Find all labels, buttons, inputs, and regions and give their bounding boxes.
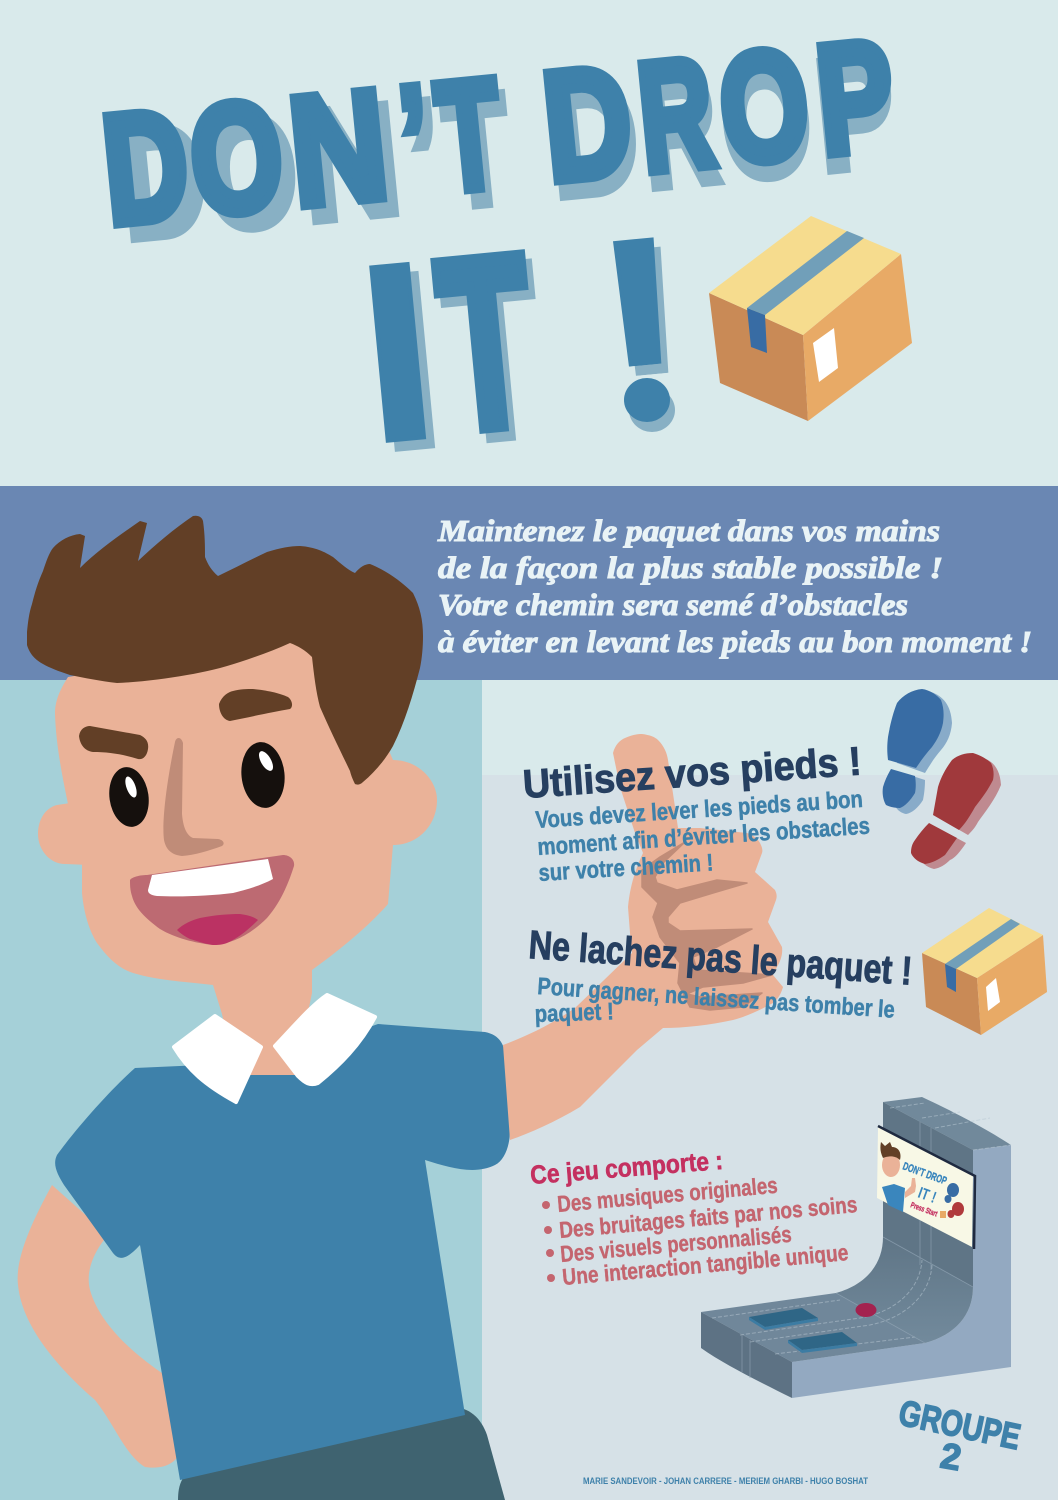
character mouth	[130, 855, 294, 945]
title line two shadow: T	[436, 215, 550, 491]
character ears	[38, 760, 437, 865]
cabinet back wall	[883, 1102, 973, 1287]
screen prompt: Press Start	[909, 1200, 939, 1219]
title line one shadow: D	[113, 91, 213, 272]
character pants	[178, 1407, 505, 1500]
title line one: ’	[392, 53, 438, 229]
button two	[788, 1332, 857, 1353]
title line one shadow: T	[437, 61, 517, 241]
cabinet top	[883, 1097, 1011, 1150]
title: DON'T DROP IT !	[95, 8, 902, 506]
panel: header background	[0, 0, 1058, 486]
title line one: O	[182, 68, 291, 250]
character hair	[27, 516, 423, 785]
body line two: paquet !	[534, 998, 614, 1028]
icon: large parcel	[709, 216, 912, 421]
heading: Ce jeu comporte: Ce jeu comporte :	[529, 1145, 724, 1190]
illustration: character	[18, 516, 783, 1500]
icon: small parcel	[922, 908, 1047, 1035]
character collar	[174, 995, 375, 1102]
title line two: T	[429, 205, 543, 482]
credits: MARIE SANDEVOIR - JOHAN CARRERE - MERIEM GHARBI - HUGO BOSHAT	[583, 1476, 868, 1486]
feature four: Une interaction tangible unique	[561, 1239, 849, 1290]
feature two: Des bruitages faits par nos soins	[558, 1191, 858, 1243]
thumb finger creases	[642, 842, 772, 1010]
button one	[749, 1308, 818, 1330]
screen icons	[940, 1183, 964, 1218]
red ball	[856, 1303, 876, 1317]
character eyes	[106, 740, 288, 829]
instruction line three: Votre chemin sera semé d’obstacles	[438, 587, 908, 622]
instruction line one: Maintenez le paquet dans vos mains	[437, 513, 940, 548]
dashed seam lines	[712, 1103, 1011, 1354]
title line one: T	[429, 46, 509, 225]
panel: instruction band	[0, 486, 1058, 680]
cabinet screen	[877, 1126, 975, 1249]
title line one shadow: D	[542, 49, 645, 230]
title line two shadow	[394, 246, 668, 452]
section: do not drop the parcel	[527, 923, 914, 1028]
cabinet side panel	[792, 1145, 1011, 1398]
title line one shadow: ’	[402, 68, 448, 244]
body line one: Pour gagner, ne laissez pas tomber le	[537, 973, 896, 1024]
panel: left character background	[0, 680, 482, 1500]
character left arm	[18, 1185, 180, 1468]
illustration: arcade game cabinet	[701, 1097, 1011, 1398]
character shirt	[55, 1024, 510, 1480]
exclamation dot shadow	[629, 388, 675, 432]
body line one: Vous devez lever les pieds au bon	[535, 786, 864, 834]
icon: footprints	[883, 689, 1001, 869]
character thumbs-up hand	[503, 734, 783, 1140]
cabinet base top	[701, 1293, 925, 1362]
GROUPE: GROUPE	[895, 1392, 1024, 1457]
section: use your feet	[522, 739, 871, 887]
title line one	[95, 8, 902, 258]
screen title two: IT !	[916, 1185, 938, 1207]
title line one shadow: N	[294, 72, 407, 255]
body line three: sur votre chemin !	[538, 849, 714, 887]
title line one shadow: O	[196, 82, 305, 264]
title line two shadow: I	[358, 217, 455, 505]
title line two: !	[586, 183, 698, 475]
feature bullets	[542, 1201, 555, 1282]
character eyebrows	[79, 689, 292, 759]
title line two: I	[349, 208, 446, 496]
screen mini character	[880, 1142, 916, 1212]
title line one: O	[712, 16, 816, 198]
title line two shadow: !	[593, 192, 705, 484]
title line one: D	[536, 33, 639, 215]
feature three: Des visuels personnalisés	[559, 1221, 793, 1267]
character nose	[163, 738, 224, 856]
feature one: Des musiques originales	[556, 1172, 779, 1217]
body line two: moment afin d’éviter les obstacles	[537, 813, 871, 861]
title line two	[369, 237, 662, 443]
heading: Utilisez vos pieds: Utilisez vos pieds !	[522, 739, 863, 807]
screen title: DON’T DROP	[901, 1161, 948, 1188]
instruction line two: de la façon la plus stable possible !	[438, 550, 943, 585]
cabinet base front	[701, 1312, 792, 1398]
text block: instructions	[437, 513, 1032, 659]
number 2: 2	[938, 1435, 964, 1478]
section: game features list	[529, 1145, 858, 1290]
title line one: R	[631, 25, 721, 206]
heading: Ne lachez pas le paquet: Ne lachez pas le paquet !	[527, 923, 914, 994]
title line one: N	[282, 57, 395, 240]
title line one shadow	[113, 24, 902, 272]
title line one: D	[95, 77, 196, 258]
title line one shadow: O	[714, 32, 818, 214]
blue shoe print	[883, 689, 952, 814]
panel: right lower background	[482, 680, 1058, 1500]
character face and neck	[55, 640, 393, 1075]
title line one shadow: R	[634, 41, 725, 221]
label: group number	[895, 1392, 1024, 1478]
red shoe print	[911, 753, 1001, 869]
instruction line four: à éviter en levant les pieds au bon moment !	[438, 624, 1032, 659]
exclamation dot	[624, 378, 670, 422]
cabinet curved ramp	[836, 1237, 973, 1343]
title line one: P	[809, 8, 902, 188]
solid seam lines	[742, 1122, 973, 1378]
title line one shadow: P	[809, 24, 902, 204]
